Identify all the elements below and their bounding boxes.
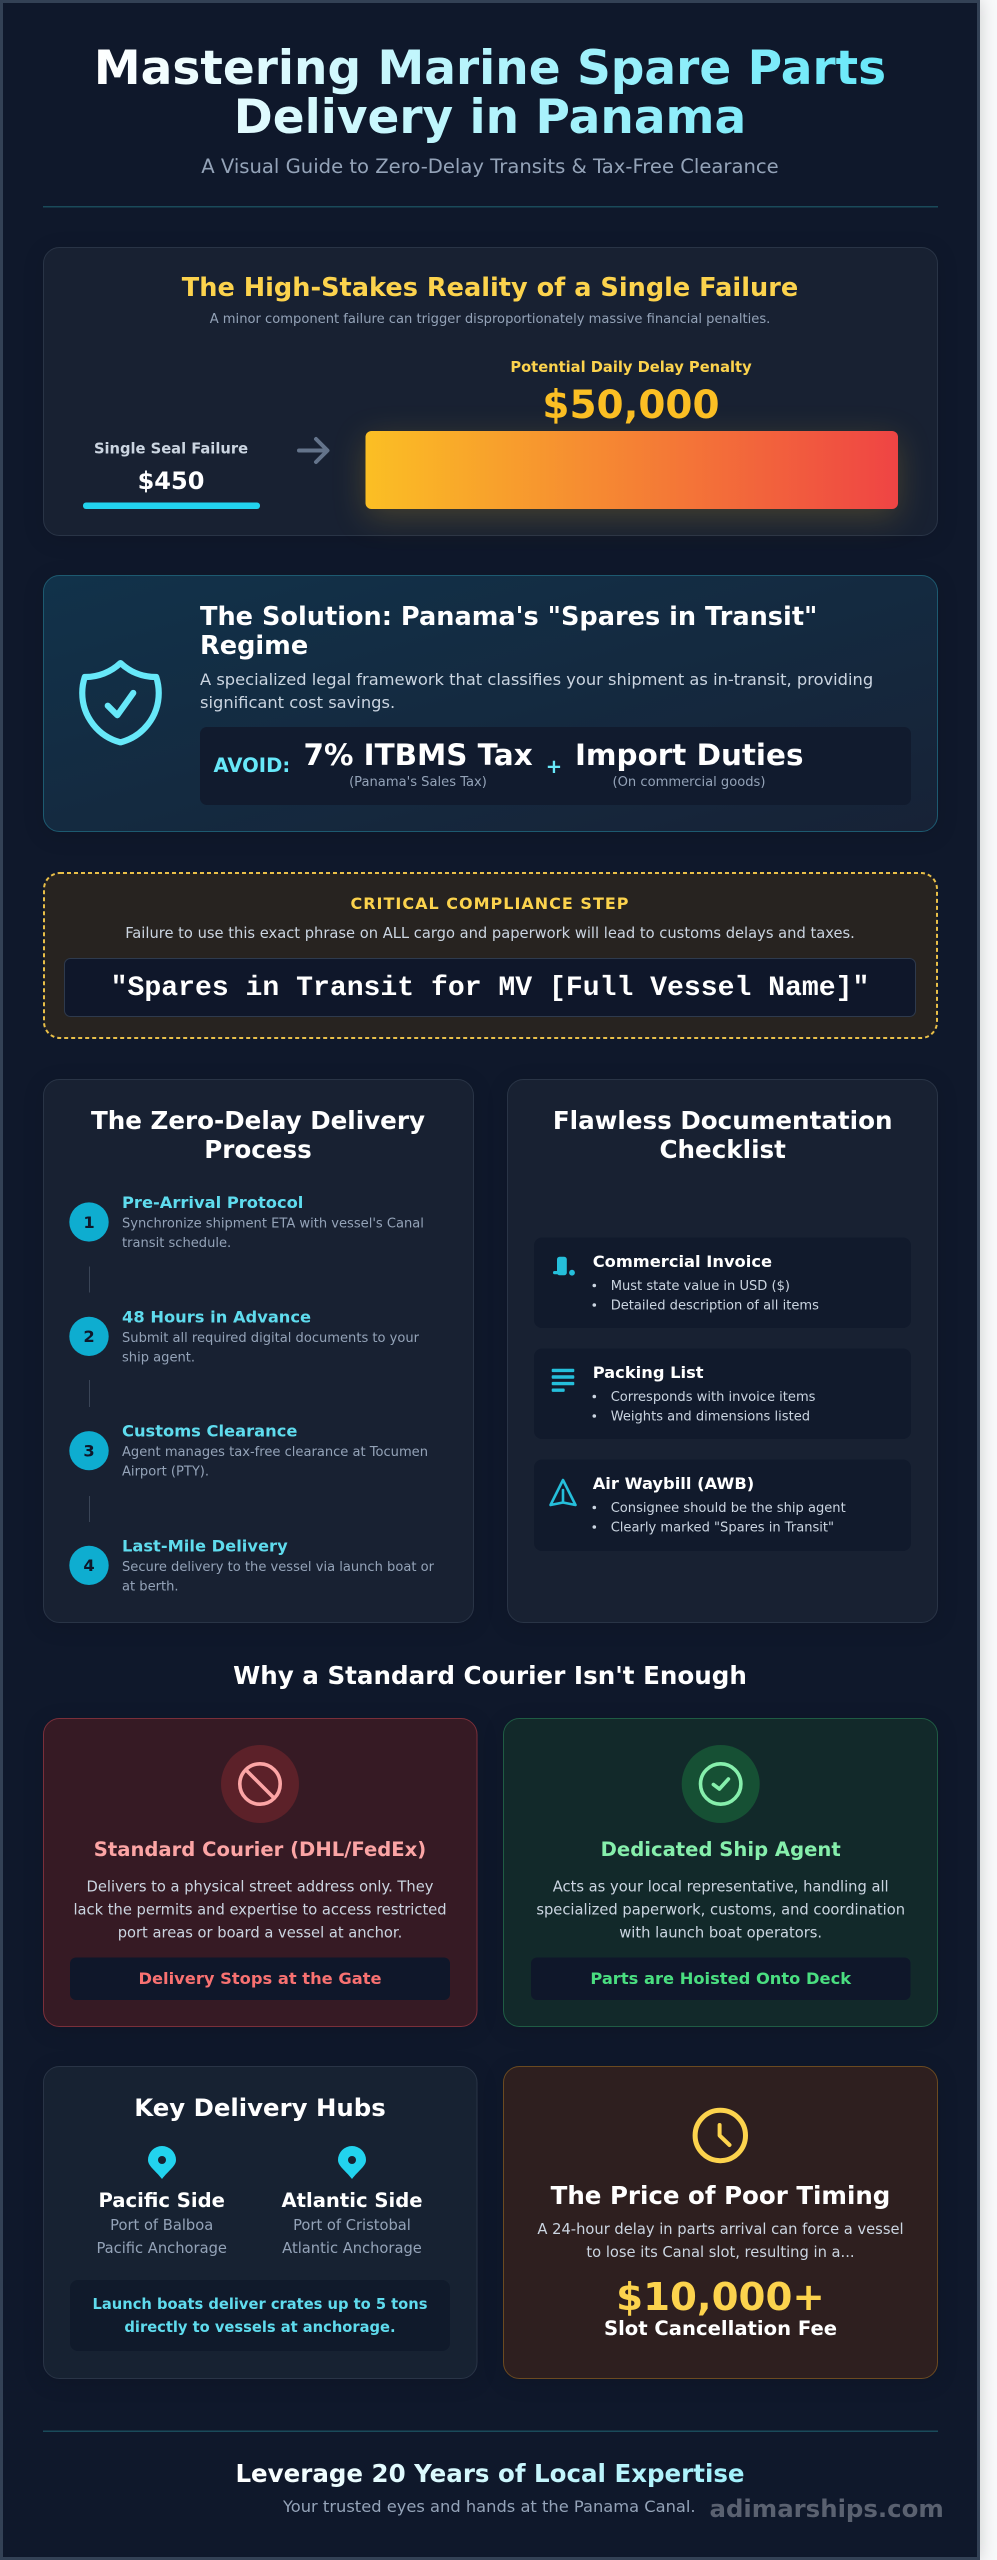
description bbox=[536, 1879, 905, 1942]
required phrase bbox=[64, 958, 916, 1016]
description: port areas or board a vessel at anchor. bbox=[118, 1925, 402, 1942]
step 2: 48 Hours in Advance bbox=[122, 1307, 311, 1326]
footer text: Your trusted eyes and hands at the Panama Canal. bbox=[282, 2497, 696, 2516]
footer bbox=[235, 2459, 944, 2523]
avoid box: AVOID: bbox=[214, 754, 290, 777]
step 1 bbox=[69, 1193, 424, 1251]
step 1: transit schedule. bbox=[122, 1236, 231, 1251]
penalty cost: $50,000 bbox=[542, 383, 720, 428]
icon: waybill bbox=[550, 1480, 576, 1505]
item: packing list: Packing List bbox=[593, 1363, 704, 1382]
outcome: Parts are Hoisted Onto Deck bbox=[590, 1969, 852, 1988]
step 1: 1 bbox=[83, 1213, 95, 1232]
step 3: Airport (PTY). bbox=[122, 1465, 209, 1480]
description: Delivers to a physical street address only. They bbox=[87, 1879, 434, 1896]
step 2: Submit all required digital documents to your bbox=[122, 1331, 420, 1346]
step 2: ship agent. bbox=[122, 1350, 195, 1366]
heading: Regime bbox=[200, 631, 308, 661]
description: A 24-hour delay in parts arrival can force a vessel bbox=[537, 2221, 904, 2238]
panel: standard courier bbox=[44, 1718, 477, 2026]
hub: pacific: Pacific Side bbox=[98, 2189, 225, 2212]
hub: atlantic bbox=[281, 2146, 423, 2257]
step 4: Secure delivery to the vessel via launch boat or bbox=[122, 1560, 435, 1575]
hub: atlantic: Port of Cristobal bbox=[293, 2217, 411, 2234]
hub: pacific: Pacific Anchorage bbox=[96, 2240, 227, 2257]
callout: launch boats: Launch boats deliver crates up to 5 tons bbox=[93, 2296, 428, 2313]
description bbox=[73, 1879, 447, 1942]
step 2: 2 bbox=[83, 1327, 95, 1346]
item: commercial invoice: Commercial Invoice bbox=[593, 1252, 772, 1271]
item: packing list bbox=[534, 1348, 911, 1439]
heading bbox=[200, 602, 817, 661]
heading: The Zero-Delay Delivery bbox=[91, 1106, 425, 1135]
item: air waybill: Air Waybill (AWB) bbox=[593, 1474, 754, 1493]
penalty cost: Potential Daily Delay Penalty bbox=[510, 359, 752, 376]
heading: Flawless Documentation bbox=[553, 1106, 893, 1135]
icon: clock bbox=[695, 2110, 746, 2161]
big number: $10,000+ bbox=[616, 2275, 825, 2320]
panel: documentation checklist bbox=[508, 1080, 938, 1622]
hub: pacific: Port of Balboa bbox=[110, 2217, 213, 2234]
heading: CRITICAL COMPLIANCE STEP bbox=[350, 894, 630, 913]
outcome: Delivery Stops at the Gate bbox=[138, 1969, 382, 1988]
icon: list bbox=[552, 1369, 574, 1392]
icon: prohibited bbox=[221, 1745, 299, 1823]
heading: Standard Courier (DHL/FedEx) bbox=[94, 1838, 426, 1861]
description: A minor component failure can trigger disproportionately massive financial penalties. bbox=[210, 312, 770, 327]
hub: pacific bbox=[96, 2146, 227, 2257]
panel: key delivery hubs bbox=[44, 2066, 477, 2378]
icon: invoice bbox=[553, 1257, 575, 1276]
heading bbox=[553, 1106, 893, 1164]
section heading: courier comparison: Why a Standard Courier Isn't Enough bbox=[233, 1661, 747, 1690]
step 2 bbox=[69, 1307, 420, 1366]
item: air waybill bbox=[534, 1460, 911, 1551]
warning text: Failure to use this exact phrase on ALL cargo and paperwork will lead to customs delays and taxes. bbox=[125, 925, 855, 942]
panel: high-stakes reality bbox=[44, 248, 938, 536]
description bbox=[537, 2221, 904, 2261]
item: packing list: Corresponds with invoice items bbox=[611, 1390, 816, 1405]
panel: the solution bbox=[44, 576, 938, 832]
heading: Process bbox=[204, 1135, 312, 1164]
heading bbox=[91, 1106, 425, 1164]
icon: shield check bbox=[79, 660, 162, 746]
outcome bbox=[70, 1958, 450, 2000]
outcome bbox=[531, 1958, 910, 2000]
icon: arrow bbox=[299, 439, 328, 462]
icon: check circle bbox=[682, 1745, 760, 1823]
avoid box: Import Duties bbox=[575, 738, 803, 772]
title: Mastering Marine Spare Parts bbox=[94, 41, 886, 96]
heading: The Price of Poor Timing bbox=[551, 2181, 890, 2210]
watermark: adimarships.com bbox=[710, 2494, 944, 2523]
item: commercial invoice: Detailed description of all items bbox=[611, 1299, 819, 1314]
description: A specialized legal framework that classifies your shipment as in-transit, providing bbox=[200, 670, 873, 689]
description: Acts as your local representative, handling all bbox=[553, 1879, 889, 1896]
panel: dedicated ship agent bbox=[504, 1718, 938, 2026]
step 3: 3 bbox=[83, 1442, 95, 1460]
description: lack the permits and expertise to access restricted bbox=[73, 1902, 447, 1919]
panel: price of poor timing bbox=[504, 2066, 938, 2378]
panel: critical compliance step bbox=[44, 873, 937, 1038]
description: specialized paperwork, customs, and coordination bbox=[536, 1902, 905, 1919]
step 4: at berth. bbox=[122, 1580, 179, 1594]
footer heading: Leverage 20 Years of Local Expertise bbox=[235, 2459, 745, 2488]
avoid box bbox=[200, 727, 911, 805]
item: air waybill: Consignee should be the ship agent bbox=[611, 1501, 846, 1516]
required phrase: "Spares in Transit for MV [Full Vessel Name]" bbox=[111, 973, 869, 1004]
step 4: Last-Mile Delivery bbox=[122, 1536, 288, 1555]
step 3: Agent manages tax-free clearance at Tocumen bbox=[122, 1445, 428, 1460]
step 4: 4 bbox=[83, 1556, 95, 1575]
step 1: Synchronize shipment ETA with vessel's Canal bbox=[122, 1216, 424, 1232]
item: commercial invoice bbox=[534, 1238, 911, 1328]
heading: Dedicated Ship Agent bbox=[601, 1838, 841, 1861]
heading: The High-Stakes Reality of a Single Failure bbox=[182, 273, 798, 303]
seal failure cost: $450 bbox=[138, 467, 204, 495]
item: commercial invoice: Must state value in USD ($) bbox=[611, 1279, 790, 1294]
description: with launch boat operators. bbox=[619, 1925, 822, 1942]
hub: atlantic: Atlantic Side bbox=[281, 2189, 423, 2212]
item: air waybill: Clearly marked "Spares in Transit" bbox=[611, 1521, 834, 1536]
penalty cost bbox=[366, 359, 898, 509]
subtitle: A Visual Guide to Zero-Delay Transits & Tax-Free Clearance bbox=[201, 155, 779, 178]
step 1: Pre-Arrival Protocol bbox=[122, 1193, 303, 1212]
callout: launch boats bbox=[70, 2280, 450, 2351]
avoid box: (Panama's Sales Tax) bbox=[349, 775, 487, 790]
title bbox=[94, 41, 886, 145]
avoid box: (On commercial goods) bbox=[613, 775, 765, 790]
item: packing list: Weights and dimensions listed bbox=[611, 1410, 810, 1425]
panel: delivery process bbox=[44, 1080, 474, 1622]
heading: Key Delivery Hubs bbox=[134, 2093, 386, 2122]
avoid box: 7% ITBMS Tax bbox=[304, 738, 533, 772]
heading: Checklist bbox=[659, 1135, 786, 1164]
fee label: Slot Cancellation Fee bbox=[604, 2317, 837, 2340]
title: Delivery in Panama bbox=[234, 90, 746, 145]
callout: launch boats: directly to vessels at anchorage. bbox=[124, 2319, 396, 2336]
avoid box: + bbox=[546, 755, 562, 778]
step 3 bbox=[69, 1422, 428, 1480]
seal failure cost bbox=[83, 440, 260, 509]
seal failure cost: Single Seal Failure bbox=[94, 440, 248, 458]
description: to lose its Canal slot, resulting in a... bbox=[586, 2244, 855, 2261]
description bbox=[200, 670, 873, 712]
step 3: Customs Clearance bbox=[122, 1422, 297, 1441]
step 4 bbox=[69, 1536, 435, 1594]
header bbox=[94, 41, 886, 178]
hub: atlantic: Atlantic Anchorage bbox=[282, 2240, 422, 2257]
description: significant cost savings. bbox=[200, 693, 395, 712]
heading: The Solution: Panama's "Spares in Transit" bbox=[200, 602, 817, 632]
